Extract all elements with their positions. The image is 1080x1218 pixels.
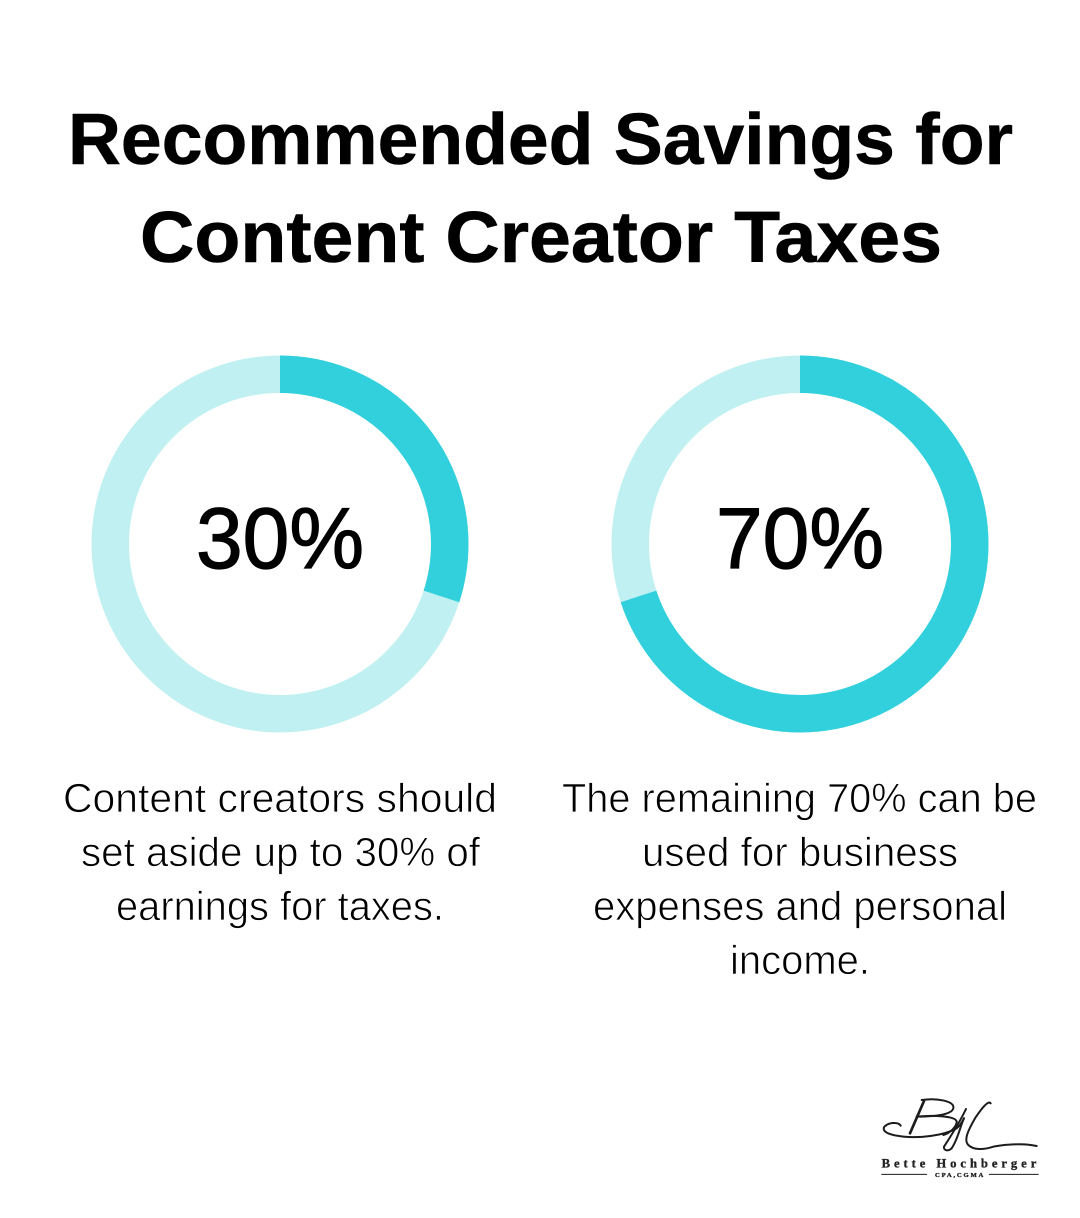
donut chart: 70%: 70% [716, 491, 884, 587]
donut chart: 30%: 30% [196, 491, 364, 587]
text block: 70% description [562, 775, 1037, 983]
text block: 70% description: expenses and personal [593, 883, 1007, 929]
text block: 30% description: earnings for taxes. [116, 883, 444, 929]
text block: 30% description: set aside up to 30% of [81, 829, 481, 875]
text block: 30% description: Content creators should [63, 775, 497, 821]
title: Content Creator Taxes [140, 198, 942, 278]
text block: 30% description [63, 775, 497, 929]
donut chart: 70% [630, 374, 970, 714]
donut chart: 30% [110, 374, 450, 714]
title: Recommended Savings for [68, 100, 1013, 180]
logo: Bette Hochberger signature [882, 1099, 1038, 1179]
text block: 70% description: income. [730, 937, 870, 983]
logo: Bette Hochberger signature: Bette Hochberger [882, 1157, 1037, 1171]
title [68, 100, 1013, 278]
text block: 70% description: used for business [642, 829, 958, 875]
text block: 70% description: The remaining 70% can be [562, 775, 1037, 821]
logo: Bette Hochberger signature: CPA,CGMA [935, 1172, 984, 1179]
